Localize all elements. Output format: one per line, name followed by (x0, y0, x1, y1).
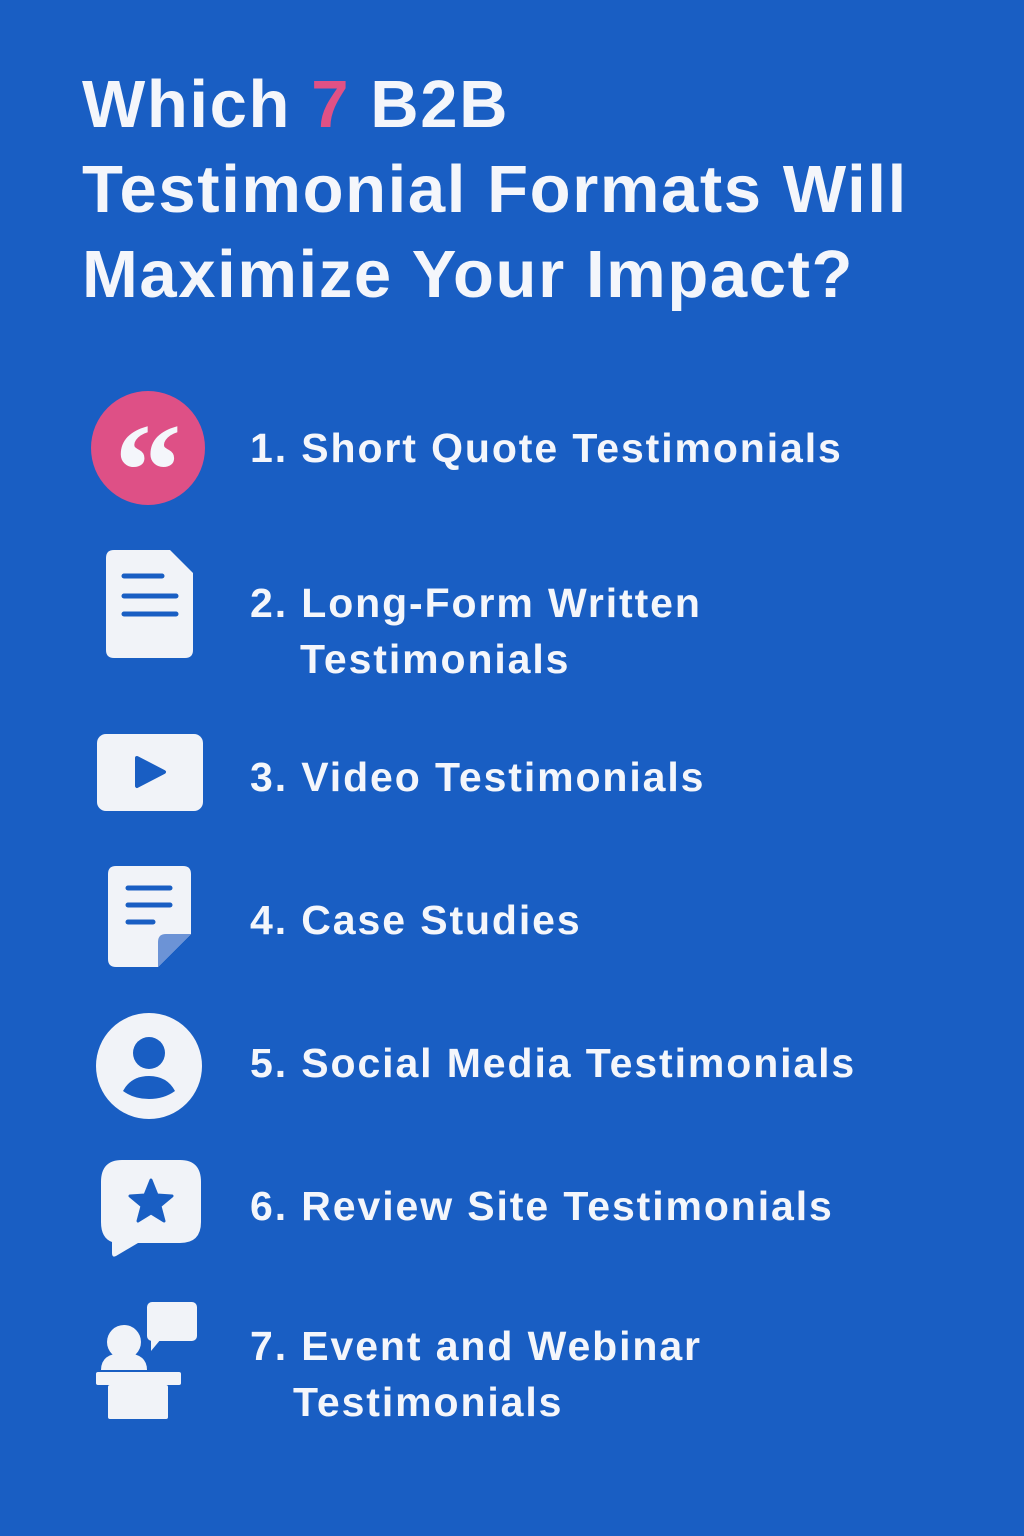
item 2 (250, 580, 702, 682)
icon: document (106, 550, 193, 658)
icon: quote (91, 391, 205, 506)
item 3: 3. Video Testimonials (250, 754, 705, 800)
title: Maximize Your Impact? (82, 237, 854, 312)
icon: person (96, 1013, 202, 1119)
icon: event speaker (96, 1302, 197, 1419)
item 7 (250, 1323, 702, 1425)
icon: video (97, 734, 203, 811)
item 1: 1. Short Quote Testimonials (250, 425, 843, 471)
title: Which 7 B2B (82, 67, 509, 142)
title: Testimonial Formats Will (82, 152, 908, 227)
item 6: 6. Review Site Testimonials (250, 1183, 834, 1229)
item 2: Testimonials (300, 636, 570, 682)
item 7: Testimonials (293, 1379, 563, 1425)
item 7: 7. Event and Webinar (250, 1323, 702, 1369)
item 4: 4. Case Studies (250, 897, 582, 943)
icon: case study (108, 866, 191, 967)
item 5: 5. Social Media Testimonials (250, 1040, 856, 1086)
title (82, 67, 908, 312)
icon: review bubble (101, 1160, 201, 1257)
item 2: 2. Long-Form Written (250, 580, 702, 626)
